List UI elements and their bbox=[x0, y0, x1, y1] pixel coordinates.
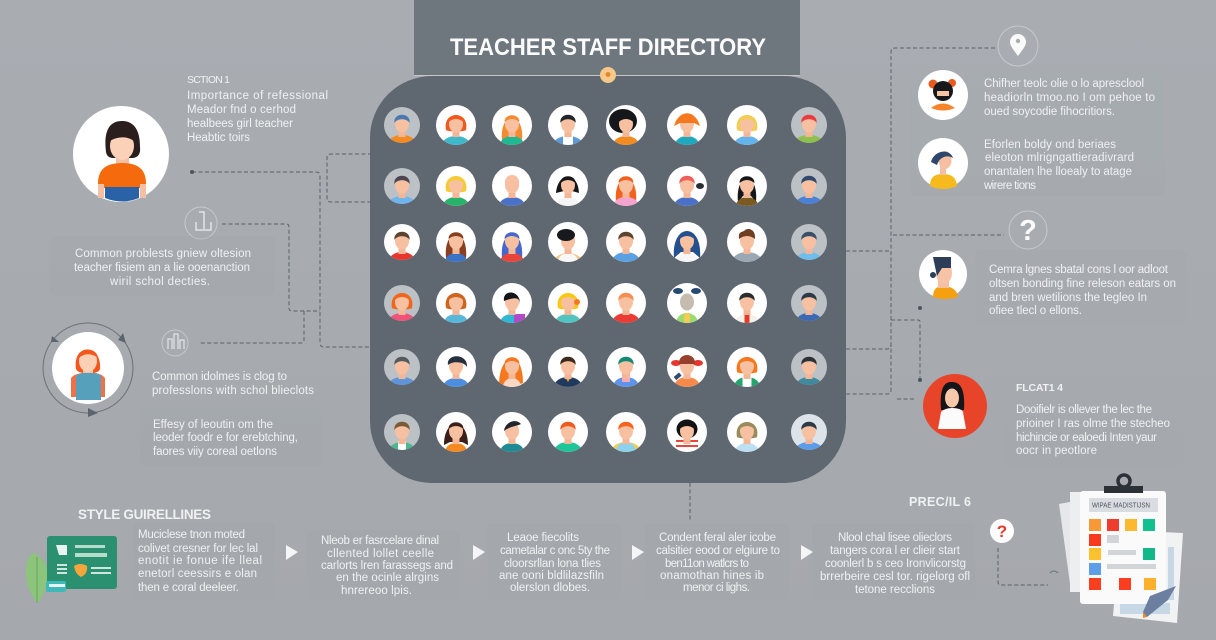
panel: step 4 bbox=[645, 524, 790, 600]
text: cemra: ofiee tlecl o ellons. bbox=[989, 305, 1082, 317]
text: cemra: Cemra lgnes sbatal cons l oor adloot bbox=[989, 264, 1169, 276]
icon: chart circle bbox=[162, 330, 188, 356]
avatar row 6 col 4 bbox=[548, 412, 588, 462]
panel: fleat 4: FLCAT1 4 bbox=[1016, 382, 1063, 394]
panel: step 4: menor ci lighs. bbox=[683, 582, 750, 594]
text: section 1: Importance of refessional bbox=[187, 90, 328, 102]
directory panel bbox=[370, 76, 846, 483]
avatar row 1 col 3 bbox=[492, 105, 532, 145]
text: chifher bbox=[984, 78, 1155, 118]
panel: fleat 4 bbox=[1003, 382, 1183, 466]
avatar: red circle woman bbox=[923, 374, 987, 438]
icon: question circle: ? bbox=[1019, 215, 1037, 247]
avatar row 1 col 4 bbox=[548, 105, 588, 145]
panel: step 5: tetone recclions bbox=[855, 584, 935, 596]
panel: step 4: ben11on watlcrs to bbox=[665, 558, 749, 570]
avatar row 2 col 3 bbox=[492, 166, 532, 206]
text: section 1: SCTION 1 bbox=[187, 74, 230, 86]
text: chifher: Chifher teolc olie o lo apresclool bbox=[984, 78, 1144, 90]
avatar row 6 col 5 bbox=[606, 412, 646, 462]
connector: panel to bottom row bbox=[689, 483, 691, 520]
header band bbox=[414, 0, 800, 76]
avatar row 4 col 6 bbox=[667, 283, 707, 323]
panel: step 2: en the ocinle alrgins bbox=[336, 572, 439, 584]
avatar row 2 col 8 bbox=[791, 168, 827, 204]
text: common idolmes: Common idolmes is clog to bbox=[152, 371, 287, 383]
avatar row 5 col 1 bbox=[384, 349, 420, 385]
panel: step 3: cloorsrllan lona tlies bbox=[504, 558, 601, 570]
avatar row 6 col 3 bbox=[492, 412, 532, 461]
avatar row 6 col 8 bbox=[791, 414, 827, 460]
avatar row 5 col 6 bbox=[667, 347, 707, 387]
text: common idolmes: professlons with schol blieclots bbox=[152, 385, 314, 397]
panel: step 1: enotit ie fonue ife lleal bbox=[138, 555, 262, 567]
text: section 1: Heabtic toirs bbox=[187, 132, 250, 144]
text: eforlen: Eforlen boldy ond beriaes bbox=[984, 139, 1116, 151]
connector lines: right side bbox=[846, 48, 1004, 399]
avatar row 6 col 6 bbox=[667, 412, 707, 461]
panel: step 4: calsitier eood or elgiure to bbox=[656, 545, 780, 557]
panel: fleat 4: prioiner I ras olme the stecheo bbox=[1016, 418, 1170, 430]
avatar row 5 col 3 bbox=[492, 347, 532, 387]
text: chifher: headiorln tmoo.no I om pehoe to bbox=[984, 92, 1155, 104]
avatar row 4 col 8 bbox=[791, 285, 827, 321]
panel: step 1: colivet cresner for lec lal bbox=[138, 543, 258, 555]
panel: right middle bbox=[919, 250, 1187, 325]
text: common idolmes bbox=[152, 371, 314, 397]
connector lines: left side bbox=[190, 154, 372, 347]
panel: fleat 4: Dooifielr is ollever the lec the bbox=[1016, 404, 1152, 416]
avatar row 4 col 3 bbox=[492, 283, 532, 323]
avatar row 6 col 1 bbox=[384, 414, 420, 460]
panel: step 5: coonlerl b s ceo Ironvlicorstg bbox=[825, 558, 966, 570]
panel: step 2: carlorts lren farassegs and bbox=[321, 560, 453, 572]
avatar row 1 col 8 bbox=[791, 107, 827, 143]
avatar row 2 col 6 bbox=[667, 166, 707, 206]
text: eforlen bbox=[983, 139, 1134, 192]
avatar row 4 col 1 bbox=[384, 285, 420, 321]
panel: right upper bbox=[910, 70, 1165, 196]
icon: red question badge: ? bbox=[997, 522, 1007, 541]
text: chifher: oued soycodie fihocritiors. bbox=[984, 106, 1115, 118]
panel: step 2: hnrereoo lpis. bbox=[341, 585, 412, 597]
label: precial 6: PREC/IL 6 bbox=[909, 495, 971, 509]
icon: red question badge bbox=[990, 519, 1014, 543]
panel: step 3: olerslon dlobes. bbox=[510, 582, 590, 594]
avatar row 3 col 5 bbox=[606, 222, 646, 262]
icon: gold pin badge bbox=[600, 67, 616, 83]
panel: common problems bbox=[50, 236, 275, 296]
text: cemra bbox=[989, 264, 1176, 317]
panel: fleat 4: hichincie or ealoedi Inten yaur bbox=[1016, 432, 1157, 444]
avatar: woman in orange shirt bbox=[73, 106, 169, 202]
panel: step 1: then e coral deeleer. bbox=[138, 582, 239, 594]
avatar row 4 col 2 bbox=[436, 283, 476, 323]
icon: location pin circle bbox=[998, 26, 1038, 66]
panel: step 3: ane ooni bldlilazsfiln bbox=[499, 570, 604, 582]
avatar row 3 col 8 bbox=[791, 224, 827, 260]
avatar row 5 col 2 bbox=[436, 347, 476, 387]
icon: green card with leaf bbox=[26, 536, 117, 603]
panel: common problems: wiril schol decties. bbox=[109, 276, 210, 288]
arrow 1 bbox=[286, 545, 298, 560]
icon: clipboard with colour blocks: WIPAE MADISTIJSN bbox=[1092, 502, 1150, 510]
panel: effesy: leoder foodr e for erebtching, bbox=[153, 432, 298, 444]
arrow 3 bbox=[632, 545, 644, 560]
avatar row 3 col 7 bbox=[727, 222, 767, 262]
avatar: girl with red bows bbox=[918, 70, 968, 120]
heading: style guidelines: STYLE GUIRELLINES bbox=[78, 507, 211, 522]
title: TEACHER STAFF DIRECTORY bbox=[450, 34, 766, 61]
avatar row 5 col 4 bbox=[548, 347, 588, 387]
panel: effesy: Effesy of leoutin om the bbox=[153, 419, 273, 431]
avatar row 2 col 4 bbox=[548, 166, 588, 206]
panel: step 3: cametalar c onc 5ty the bbox=[500, 545, 610, 557]
panel: step 2: Nleob er fasrcelare dinal bbox=[321, 535, 439, 547]
avatar: ring with orange-haired teacher bbox=[43, 323, 133, 417]
panel: step 1: enetorl ceessirs e olan bbox=[138, 568, 257, 580]
avatar row 4 col 4 bbox=[548, 283, 588, 323]
avatar row 6 col 2 bbox=[436, 412, 476, 461]
avatar row 5 col 8 bbox=[791, 349, 827, 395]
panel: step 5: Nlool chal lisee olieclors bbox=[838, 532, 952, 544]
text: eforlen: onantalen lhe lloealy to atage bbox=[984, 166, 1132, 178]
arrow 2 bbox=[473, 545, 485, 560]
text: cemra: oltsen bonding fine releson eatars on bbox=[989, 278, 1176, 290]
panel: step 2 bbox=[307, 530, 460, 600]
avatar: yellow shirt bbox=[918, 138, 968, 189]
panel: common problems: Common problests gniew oltesion bbox=[75, 248, 251, 260]
text: section 1 bbox=[187, 74, 328, 144]
avatar row 3 col 6 bbox=[667, 222, 707, 262]
text: section 1: healbees girl teacher bbox=[187, 118, 293, 130]
avatar row 1 col 6 bbox=[667, 105, 707, 145]
panel: step 4: onamothan hines ib bbox=[660, 570, 764, 582]
avatar row 3 col 3 bbox=[492, 222, 532, 262]
text: section 1: Meador fnd o cerhod bbox=[187, 104, 296, 116]
avatar row 1 col 2 bbox=[436, 105, 476, 145]
panel: effesy: faores viiy coreal oetlons bbox=[153, 446, 277, 458]
panel top highlight bbox=[414, 74, 800, 76]
panel: step 1: Muciclese tnon moted bbox=[138, 529, 245, 541]
panel: section 1 left bbox=[73, 74, 328, 202]
avatar row 4 col 7 bbox=[727, 283, 767, 323]
avatar: headwear teacher bbox=[919, 250, 967, 299]
avatar row 3 col 4 bbox=[548, 222, 588, 262]
avatar row 3 col 1 bbox=[384, 224, 420, 260]
panel: fleat 4: oocr in peotlore bbox=[1016, 445, 1097, 457]
panel: step 4: Condent feral aler icobe bbox=[659, 532, 776, 544]
panel: step 5: tangers cora l er clieir start bbox=[830, 545, 961, 557]
avatar row 3 col 2 bbox=[436, 222, 476, 262]
panel: effesy bbox=[140, 408, 322, 466]
text: eforlen: eleoton mlrigngattieradivrard bbox=[985, 152, 1134, 164]
panel: common problems: teacher fisiem an a lie ooenanction bbox=[74, 262, 250, 274]
icon: books circle bbox=[185, 207, 217, 239]
avatar row 1 col 5 bbox=[606, 105, 646, 145]
icon: clipboard with colour blocks bbox=[1059, 475, 1183, 623]
avatar grid bbox=[384, 105, 827, 462]
text: eforlen: wirere tions bbox=[983, 180, 1036, 192]
panel: step 5: brrerbeire cesl tor. rigelorg ofl bbox=[820, 571, 970, 583]
panel: step 1 bbox=[133, 522, 275, 600]
panel: step 5 bbox=[812, 524, 975, 600]
avatar row 1 col 1 bbox=[384, 107, 420, 143]
avatar row 5 col 5 bbox=[606, 347, 646, 387]
text: cemra: and bren wetilions the tegleo In bbox=[989, 292, 1147, 304]
connector: question to clipboard bbox=[998, 548, 1058, 585]
avatar row 2 col 1 bbox=[384, 168, 420, 204]
avatar row 1 col 7 bbox=[727, 105, 767, 145]
avatar row 2 col 5 bbox=[606, 166, 646, 206]
panel: step 3: Leaoe fiecolits bbox=[507, 532, 579, 544]
avatar row 2 col 7 bbox=[727, 166, 767, 206]
panel: step 3 bbox=[487, 524, 622, 600]
avatar row 2 col 2 bbox=[436, 166, 476, 206]
panel: step 2: cllented lollet ceelle bbox=[327, 548, 434, 560]
avatar row 6 col 7 bbox=[727, 412, 767, 461]
avatar row 5 col 7 bbox=[727, 347, 767, 387]
arrow 4 bbox=[801, 545, 813, 560]
icon: question circle bbox=[1009, 211, 1047, 249]
avatar row 4 col 5 bbox=[606, 283, 646, 323]
